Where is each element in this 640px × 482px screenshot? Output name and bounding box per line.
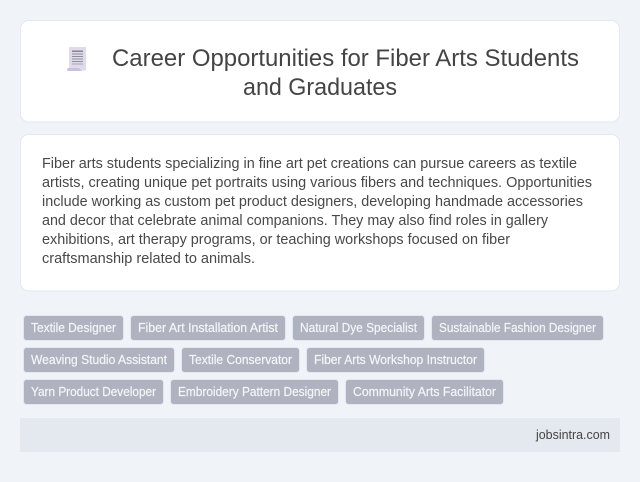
panel: description [20,134,620,291]
text block: description: include working as custom pet product designers, developing handmade accessories [42,194,583,210]
text block: description: Fiber arts students specializing in fine art pet creations can pursue careers as textile [42,156,577,172]
text block: description: craftsmanship related to animals. [42,251,255,267]
title: and Graduates [243,74,397,101]
icon: document scroll [67,47,86,71]
tag: Textile Conservator [182,348,300,372]
tag: Fiber Arts Workshop Instructor [306,348,484,372]
text block: description: artists, creating unique pet portraits using various fibers and techniques. Opportunities [42,175,592,191]
tag: Community Arts Facilitator: Community Arts Facilitator [353,385,496,399]
tag: Community Arts Facilitator [346,380,504,404]
tag: Natural Dye Specialist: Natural Dye Specialist [300,321,418,335]
text block: description: exhibitions, art therapy programs, or teaching workshops focused on fiber [42,232,510,248]
tag: Natural Dye Specialist [292,316,424,340]
tag: Embroidery Pattern Designer [170,380,338,404]
tag: Yarn Product Developer: Yarn Product Developer [31,385,156,399]
tag: Sustainable Fashion Designer [432,316,604,340]
tag: Fiber Art Installation Artist [130,316,286,340]
footer bar [20,418,620,452]
tag: Fiber Art Installation Artist: Fiber Art Installation Artist [138,321,279,335]
tag: Fiber Arts Workshop Instructor: Fiber Arts Workshop Instructor [314,353,477,367]
footer credit: jobsintra.com [535,428,610,442]
tag: Yarn Product Developer [24,380,164,404]
title [112,45,579,101]
text block: description [42,156,592,267]
tag: Weaving Studio Assistant [24,348,174,372]
panel: title header [20,20,620,122]
tag list [24,316,604,404]
tag: Embroidery Pattern Designer: Embroidery Pattern Designer [178,385,331,399]
tag: Sustainable Fashion Designer: Sustainable Fashion Designer [439,321,596,335]
tag: Weaving Studio Assistant: Weaving Studio Assistant [31,353,168,367]
text block: description: and decor that celebrate animal companions. They may also find roles in gallery [42,213,549,229]
title: Career Opportunities for Fiber Arts Students [112,45,579,72]
tag: Textile Designer: Textile Designer [31,321,116,335]
tag: Textile Conservator: Textile Conservator [189,353,292,367]
tag: Textile Designer [24,316,124,340]
